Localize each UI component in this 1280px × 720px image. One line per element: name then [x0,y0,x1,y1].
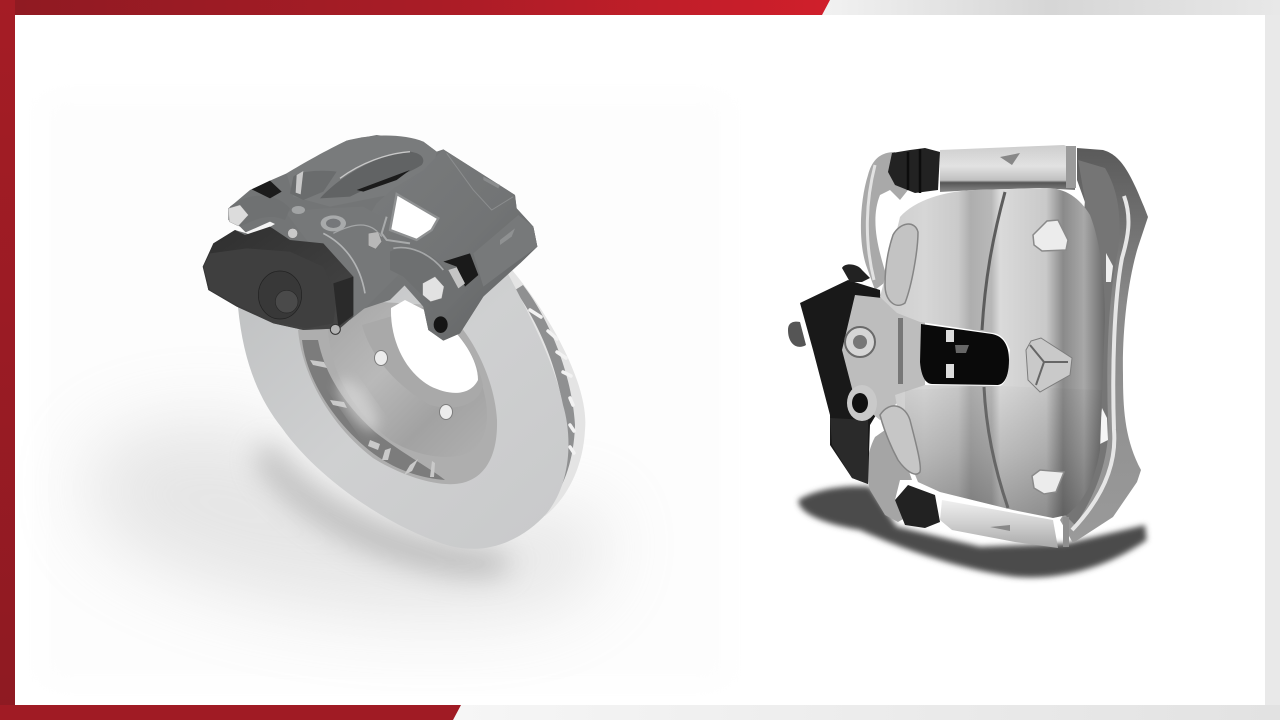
piston detail in slot [946,330,969,378]
piston port [845,327,875,357]
caliper central body [842,295,925,420]
vent fins [310,360,435,477]
motor cover [203,248,337,328]
gap between guide arm and motor [245,222,275,235]
upper vent window [1033,220,1068,251]
window opening [390,194,438,240]
caliper drop shadow [798,486,1147,577]
frame: bottom grey bar [450,705,1280,720]
triangular centre stamping [1026,338,1072,392]
lower slider pin [940,500,1058,548]
hat inner step [362,305,483,408]
soft background panel behind the disc [40,95,730,685]
bridge recess [290,171,337,200]
upper rubber boot [888,148,940,193]
frame: left red bar [0,0,15,720]
upper bracket arm [861,152,908,290]
hat highlight [331,374,385,436]
disc centre bore [391,300,478,393]
disc side rim and vents [500,262,585,516]
connector stub [842,264,870,282]
front caliper assembly [788,145,1148,548]
main shield plate [880,188,1105,518]
rear bridge [287,136,437,207]
disc hat face [328,300,487,457]
brake disc assembly [90,240,605,617]
rim dark inner back [1060,160,1119,525]
upper guide arm with bolt [230,196,290,227]
outer curved rim [1060,148,1148,543]
frame: right grey bar [1265,15,1280,720]
wheel bolt holes [374,350,452,420]
disc ground shadow [90,420,605,617]
pad edge line [447,153,513,210]
lower vent window [1032,470,1064,494]
rim white gap lower [1098,408,1108,445]
guide cylinder [473,215,537,287]
brake pad housing [357,149,537,341]
lower guide arm [390,248,467,317]
vent band [302,340,445,480]
upper bolt [228,205,248,226]
guide bolt [423,277,444,302]
frame: top red bar [0,0,830,15]
upper boot [252,181,282,198]
upper lobe [885,224,918,305]
bridge window dark [320,152,423,198]
lower lobe [880,406,920,474]
inlet port [321,215,346,231]
lower rubber boot [895,485,940,528]
actuator mount tab [788,322,806,347]
motor cap [258,271,302,319]
frame: top grey bar [820,0,1280,15]
slot cutout [920,324,1009,385]
frame: bottom red bar [0,705,461,720]
lower boot [443,253,478,287]
rim white gap upper [1106,253,1113,282]
actuator motor housing [203,227,353,330]
lower bracket arm [867,430,912,522]
black actuator [800,280,885,484]
lower motor screw [330,324,340,334]
upper slider pin [940,145,1075,192]
electric brake caliper (scaled from detail coordinates) [203,135,537,341]
small bolts [288,228,382,249]
cylinder body [285,207,403,320]
caliper silhouette base [203,135,537,341]
rim light edge [1072,196,1128,530]
bleed screw [847,385,877,421]
disc hat vent ring [298,300,497,484]
arm hole [434,316,448,333]
plate groove [982,192,1008,508]
disc front friction face [238,240,568,549]
plate vertical shade [905,386,1102,518]
